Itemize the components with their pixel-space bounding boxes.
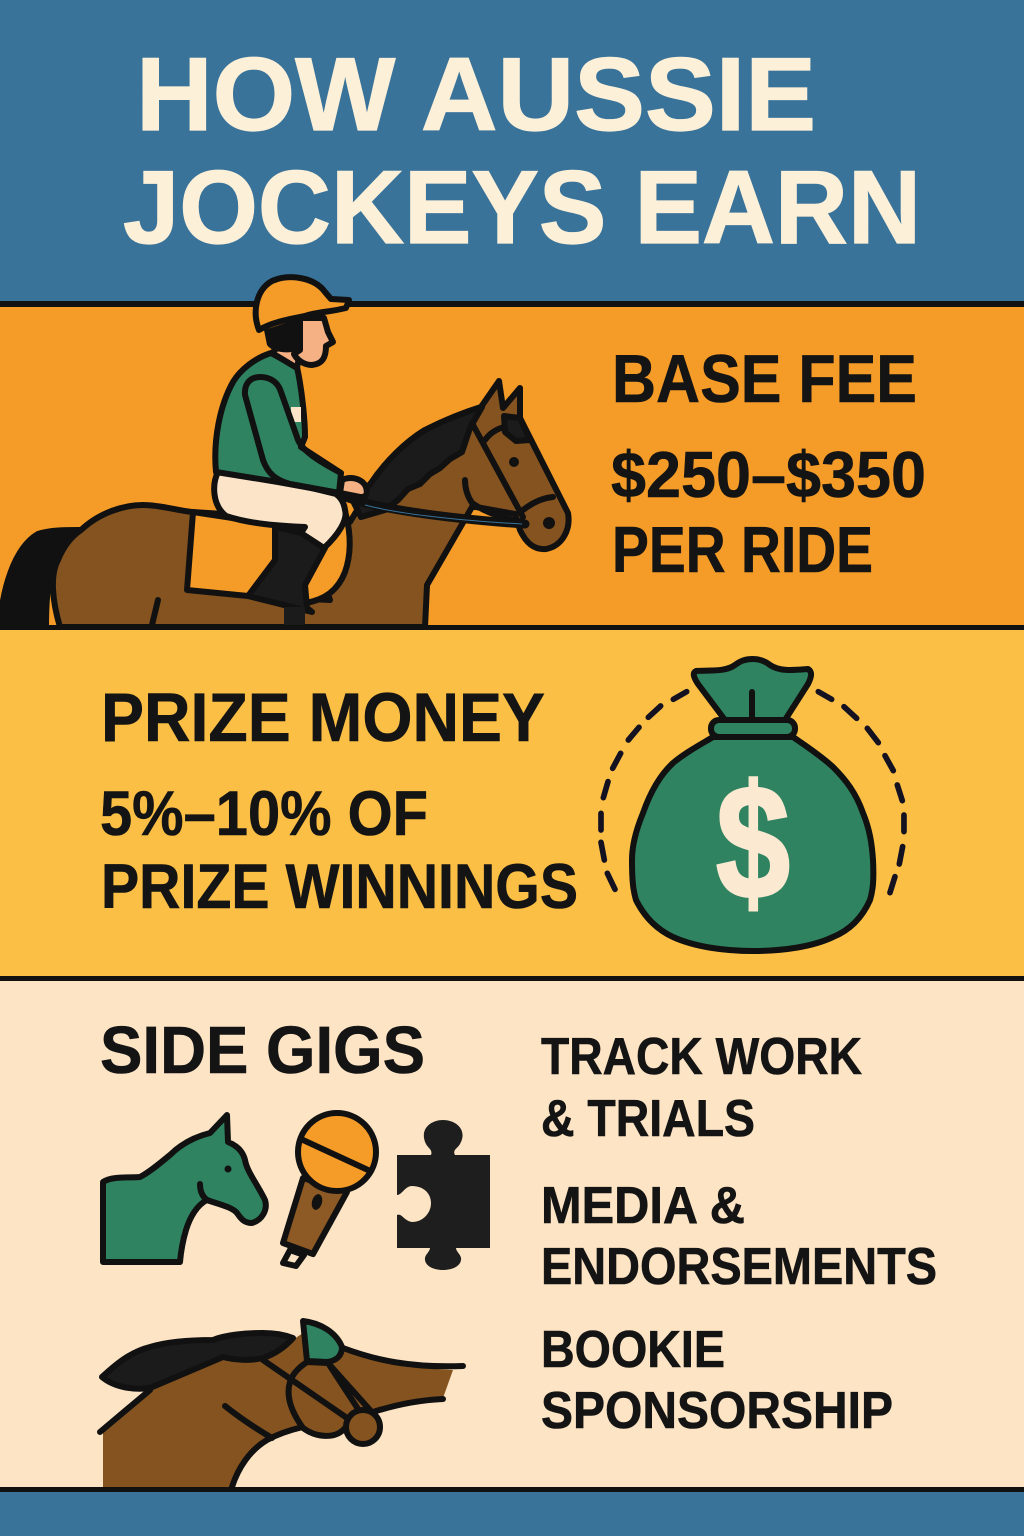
panel: base fee (0, 277, 1024, 627)
saddle cloth (187, 512, 330, 600)
bridle (289, 1362, 360, 1436)
list: side gig items: ENDORSEMENTS (541, 1238, 937, 1296)
label: base fee: BASE FEE (612, 341, 917, 417)
icon: money bag (601, 659, 904, 951)
sleeve (245, 377, 341, 473)
title: HOW AUSSIE (136, 37, 816, 153)
value: base fee amount: $250–$350 (611, 438, 926, 511)
icon: microphone (283, 1113, 376, 1266)
icon: puzzle piece (397, 1120, 490, 1270)
neck (272, 345, 300, 368)
panel: side gigs (0, 976, 1024, 1490)
jacket (215, 353, 341, 493)
dashed ring (601, 692, 904, 893)
breeches (214, 472, 346, 548)
boot (248, 527, 325, 612)
hand (340, 478, 367, 497)
list: side gig items (541, 1028, 937, 1440)
hair (264, 318, 301, 352)
mane (354, 407, 482, 517)
mane (102, 1333, 293, 1389)
face (294, 318, 333, 365)
illustration: racing horse head (100, 1321, 463, 1487)
title (123, 37, 921, 266)
icon: money bag: $ (716, 752, 790, 933)
label: prize money: PRIZE MONEY (101, 679, 545, 756)
panel: prize money (0, 625, 1024, 978)
footer band (0, 1487, 1024, 1536)
list: side gig items: SPONSORSHIP (541, 1382, 893, 1440)
helmet (256, 277, 349, 330)
value: prize money share (100, 779, 578, 922)
icon: green horse head (103, 1115, 266, 1262)
illustration: jockey on horse (0, 277, 569, 627)
reins (346, 497, 525, 524)
list: side gig items: MEDIA & (541, 1177, 745, 1235)
value: prize money share: 5%–10% OF (100, 779, 428, 849)
value: base fee amount (611, 438, 926, 586)
heading: side gigs: SIDE GIGS (100, 1013, 425, 1088)
list: side gig items: BOOKIE (541, 1321, 725, 1379)
blinker (303, 1321, 342, 1362)
list: side gig items: & TRIALS (541, 1090, 755, 1148)
value: prize money share: PRIZE WINNINGS (101, 852, 578, 922)
value: base fee amount: PER RIDE (612, 513, 873, 586)
bridle and face details (504, 416, 530, 441)
panel: header (0, 0, 1024, 302)
list: side gig items: TRACK WORK (541, 1028, 862, 1086)
title: JOCKEYS EARN (123, 150, 921, 266)
